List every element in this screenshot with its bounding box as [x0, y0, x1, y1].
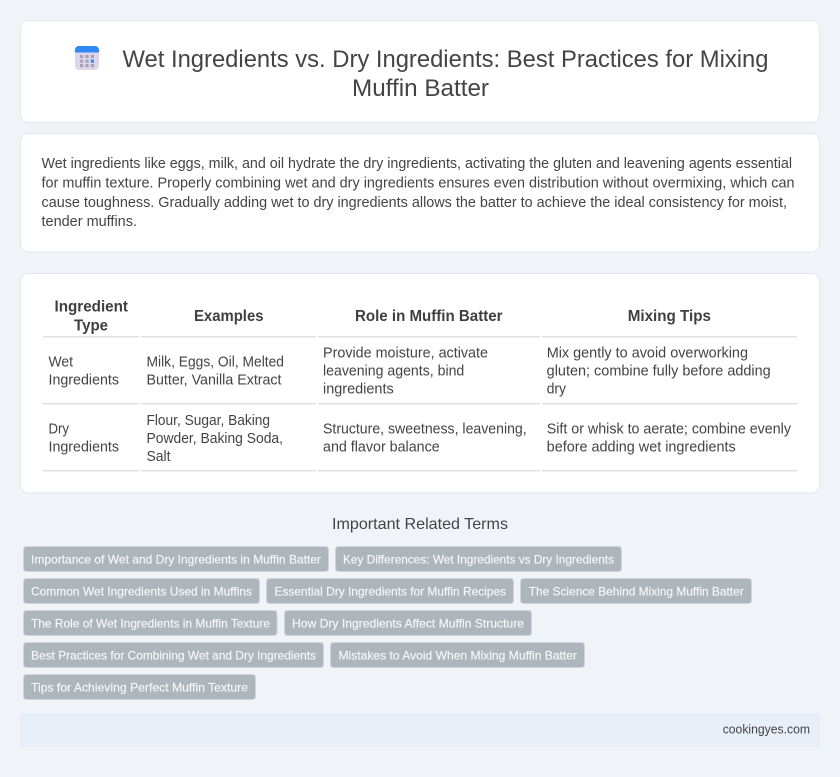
table row: dry ingredients: Dry: [48, 422, 70, 438]
tag list: related terms: Essential Dry Ingredients for Muffin Recipes: [274, 584, 506, 598]
table header: Mixing Tips: [628, 308, 711, 325]
panel: introduction: [20, 134, 820, 252]
table row: dry ingredients: Salt: [146, 449, 170, 465]
tag list: related terms: How Dry Ingredients Affect Muffin Structure: [292, 616, 524, 630]
table header: Ingredient: [54, 298, 129, 316]
footer: [20, 713, 820, 747]
title: Wet Ingredients vs. Dry Ingredients: Best Practices for Mixing: [122, 46, 768, 73]
panel: comparison table: [20, 274, 820, 493]
tag list: related terms: Importance of Wet and Dry Ingredients in Muffin Batter: [31, 552, 321, 566]
panel: title card: [20, 20, 820, 122]
intro paragraph: tender muffins.: [42, 214, 137, 230]
intro paragraph: for muffin texture. Properly combining wet and dry ingredients ensures even distribution without overmixing, which can: [42, 176, 794, 192]
tag list: related terms: Mistakes to Avoid When Mixing Muffin Batter: [338, 648, 577, 662]
table row: dry ingredients: Sift or whisk to aerate; combine evenly: [547, 422, 792, 438]
table row: wet ingredients: gluten; combine fully before adding: [547, 364, 771, 380]
table row: dry ingredients: Flour, Sugar, Baking: [146, 413, 270, 429]
title: [122, 46, 768, 102]
table row: dry ingredients: Ingredients: [48, 440, 119, 456]
intro paragraph: [42, 156, 794, 230]
tag list: related terms: The Role of Wet Ingredients in Muffin Texture: [31, 616, 270, 630]
tag list: related terms: [24, 546, 752, 700]
table row: dry ingredients: Structure, sweetness, leavening,: [323, 422, 527, 438]
table row: wet ingredients: Wet: [48, 355, 73, 371]
table row: wet ingredients: ingredients: [323, 382, 394, 398]
table row: wet ingredients: Ingredients: [48, 373, 119, 389]
tag list: related terms: Key Differences: Wet Ingredients vs Dry Ingredients: [343, 552, 614, 566]
intro paragraph: cause toughness. Gradually adding wet to dry ingredients allows the batter to achieve the ideal consistency for moist,: [42, 195, 787, 211]
intro paragraph: Wet ingredients like eggs, milk, and oil hydrate the dry ingredients, activating the gluten and leavening agents essential: [42, 156, 792, 172]
table header: [54, 298, 711, 334]
title: Muffin Batter: [352, 75, 489, 102]
table row: wet ingredients: dry: [547, 382, 567, 398]
table row: dry ingredients: and flavor balance: [323, 440, 440, 456]
tag list: related terms: The Science Behind Mixing Muffin Batter: [529, 584, 744, 598]
tag list: related terms: Common Wet Ingredients Used in Muffins: [31, 584, 252, 598]
table row: wet ingredients: leavening agents, bind: [323, 364, 464, 380]
icon: calendar: [75, 46, 99, 70]
table row: dry ingredients: [48, 413, 792, 465]
heading: important related terms: Important Related Terms: [332, 516, 508, 533]
footer: cookingyes.com: [723, 722, 810, 737]
table row: dry ingredients: Powder, Baking Soda,: [146, 431, 283, 447]
table header: Role in Muffin Batter: [355, 308, 502, 325]
table row: wet ingredients: [48, 346, 771, 398]
tag list: related terms: Tips for Achieving Perfect Muffin Texture: [31, 680, 248, 694]
table header: Examples: [194, 308, 264, 325]
table row: wet ingredients: Mix gently to avoid overworking: [547, 346, 748, 362]
table row: dry ingredients: before adding wet ingredients: [547, 440, 736, 456]
tag list: related terms: Best Practices for Combining Wet and Dry Ingredients: [31, 648, 316, 662]
table row: wet ingredients: Provide moisture, activate: [323, 346, 488, 362]
table rules: [43, 336, 797, 471]
table row: wet ingredients: Butter, Vanilla Extract: [146, 373, 282, 389]
table row: wet ingredients: Milk, Eggs, Oil, Melted: [146, 355, 284, 371]
table header: Type: [74, 318, 108, 334]
